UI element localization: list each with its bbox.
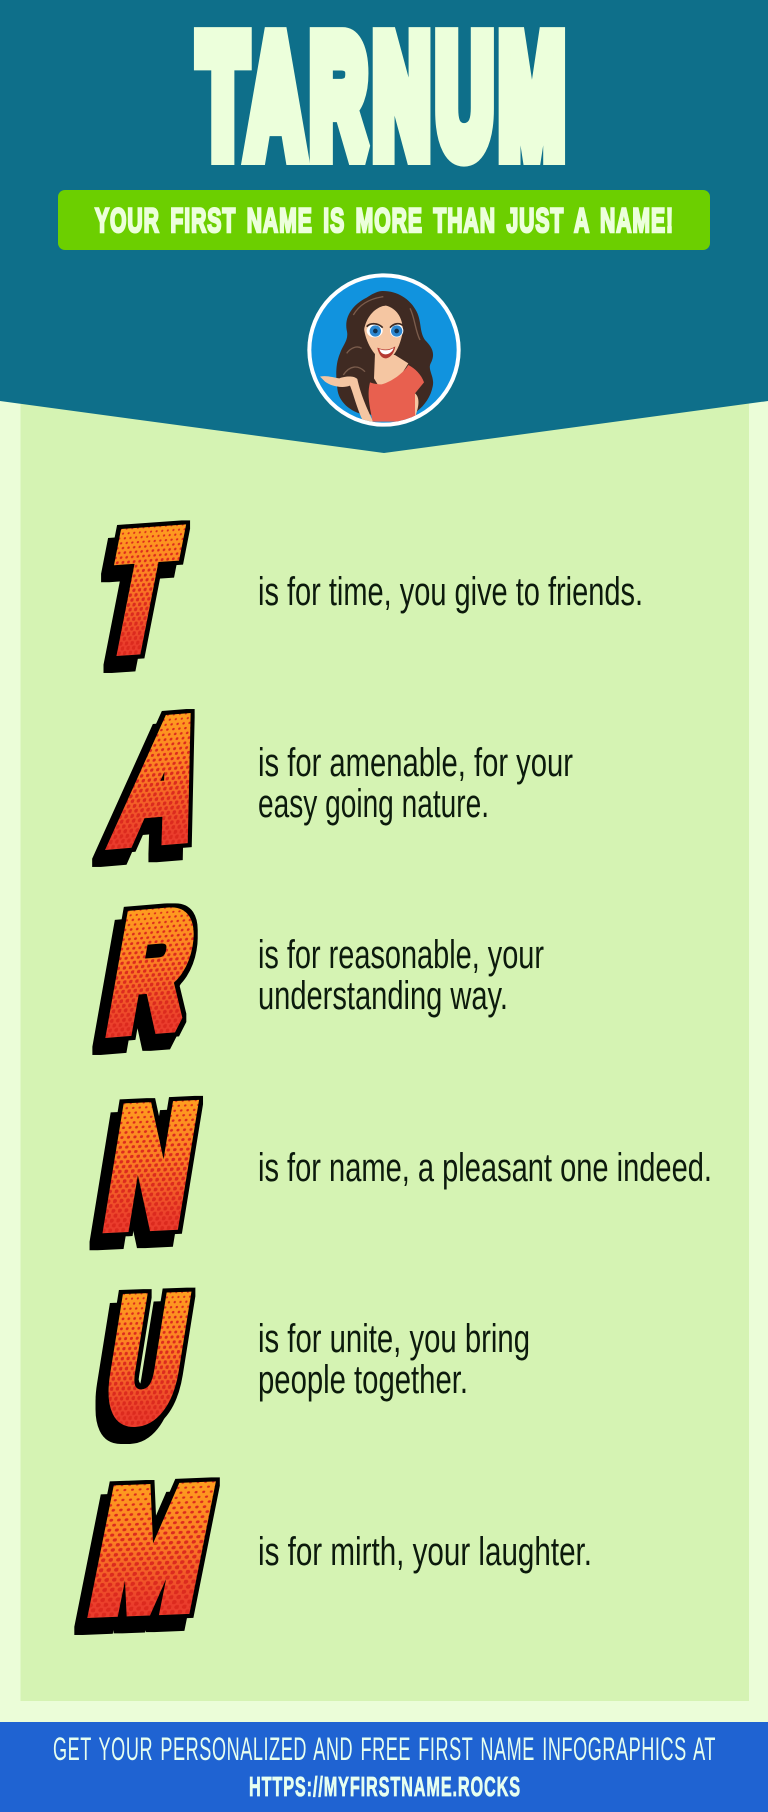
text for A: is for amenable, for your [258, 741, 573, 785]
letter N: N [97, 1076, 204, 1259]
letters panel [20, 380, 749, 1701]
text for A [258, 741, 573, 826]
letter M: M [81, 1457, 222, 1644]
header chevron band [0, 0, 768, 453]
text for R: understanding way. [258, 974, 508, 1018]
text for R [258, 933, 544, 1018]
text for R: is for reasonable, your [258, 933, 544, 977]
footer band [0, 1722, 768, 1812]
footer url: HTTPS://MYFIRSTNAME.ROCKS [249, 1771, 521, 1802]
text for U: is for unite, you bring [258, 1317, 530, 1361]
letter U: U [97, 1266, 196, 1452]
letter R: R [100, 880, 204, 1063]
subtitle banner [58, 190, 710, 250]
letter T: T [95, 500, 187, 683]
text for U [258, 1317, 530, 1402]
avatar: cartoon woman in circle [307, 273, 461, 427]
text for U: people together. [258, 1358, 468, 1402]
text for M: is for mirth, your laughter. [258, 1530, 592, 1574]
letter A: A [104, 686, 220, 876]
text for A: easy going nature. [258, 782, 489, 826]
